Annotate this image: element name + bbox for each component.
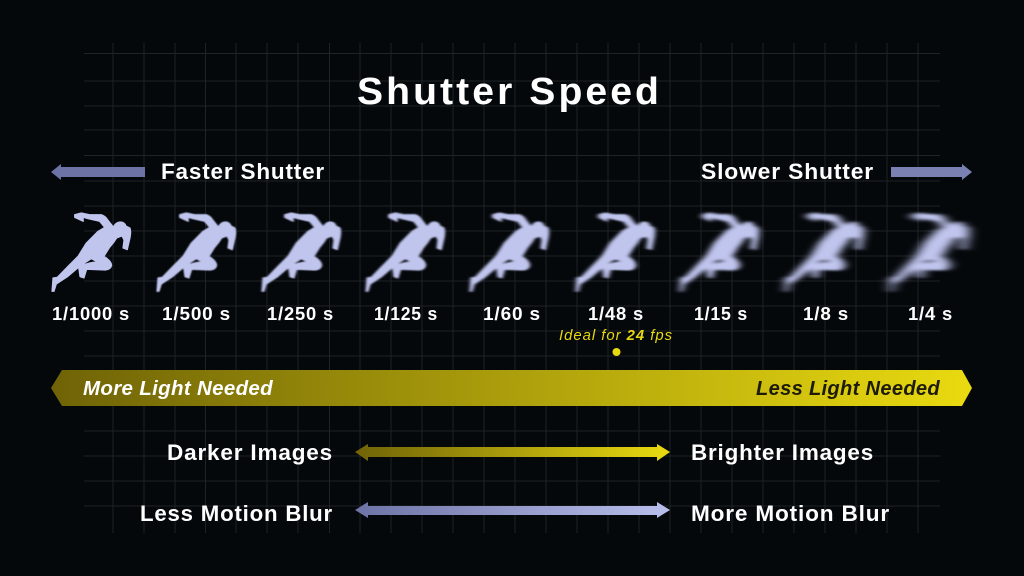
label: faster shutter: Faster Shutter bbox=[161, 159, 325, 184]
runner 1/250 s bbox=[262, 213, 341, 291]
arrow: less to more blur bbox=[355, 502, 670, 518]
label: less motion blur: Less Motion Blur bbox=[140, 501, 333, 526]
runner 1/500 s bbox=[157, 213, 236, 291]
bar label: more light needed: More Light Needed bbox=[83, 378, 273, 400]
speed label 1/60 s: 1/60 s bbox=[483, 304, 541, 324]
label: brighter images: Brighter Images bbox=[691, 440, 874, 465]
speed label 1/8 s: 1/8 s bbox=[803, 304, 849, 324]
title: Shutter Speed bbox=[357, 71, 662, 113]
runner 1/8 s bbox=[785, 213, 864, 291]
label: darker images: Darker Images bbox=[167, 440, 333, 465]
runner 1/4 s bbox=[890, 213, 969, 291]
runner 1/125 s bbox=[366, 213, 445, 291]
marker dot bbox=[612, 348, 620, 356]
bar label: less light needed: Less Light Needed bbox=[756, 378, 940, 400]
speed label 1/48 s: 1/48 s bbox=[588, 304, 644, 324]
runner 1/48 s bbox=[576, 213, 655, 291]
arrow: slower shutter bbox=[891, 164, 972, 180]
label: more motion blur: More Motion Blur bbox=[691, 501, 890, 526]
callout: ideal for 24 fps: Ideal for 24 fps bbox=[559, 327, 673, 344]
arrow: faster shutter bbox=[51, 164, 145, 180]
speed label 1/1000 s: 1/1000 s bbox=[52, 304, 130, 324]
speed label 1/125 s: 1/125 s bbox=[374, 304, 438, 324]
speed label 1/15 s: 1/15 s bbox=[694, 304, 748, 324]
speed label 1/4 s: 1/4 s bbox=[908, 304, 953, 324]
label: slower shutter: Slower Shutter bbox=[701, 159, 874, 184]
speed label 1/500 s: 1/500 s bbox=[162, 304, 231, 324]
arrow: darker to brighter bbox=[355, 444, 670, 461]
light gradient bar bbox=[51, 370, 972, 406]
runner 1/60 s bbox=[470, 213, 549, 291]
runner 1/15 s bbox=[680, 213, 759, 291]
runner 1/1000 s bbox=[52, 213, 131, 291]
speed label 1/250 s: 1/250 s bbox=[267, 304, 334, 324]
